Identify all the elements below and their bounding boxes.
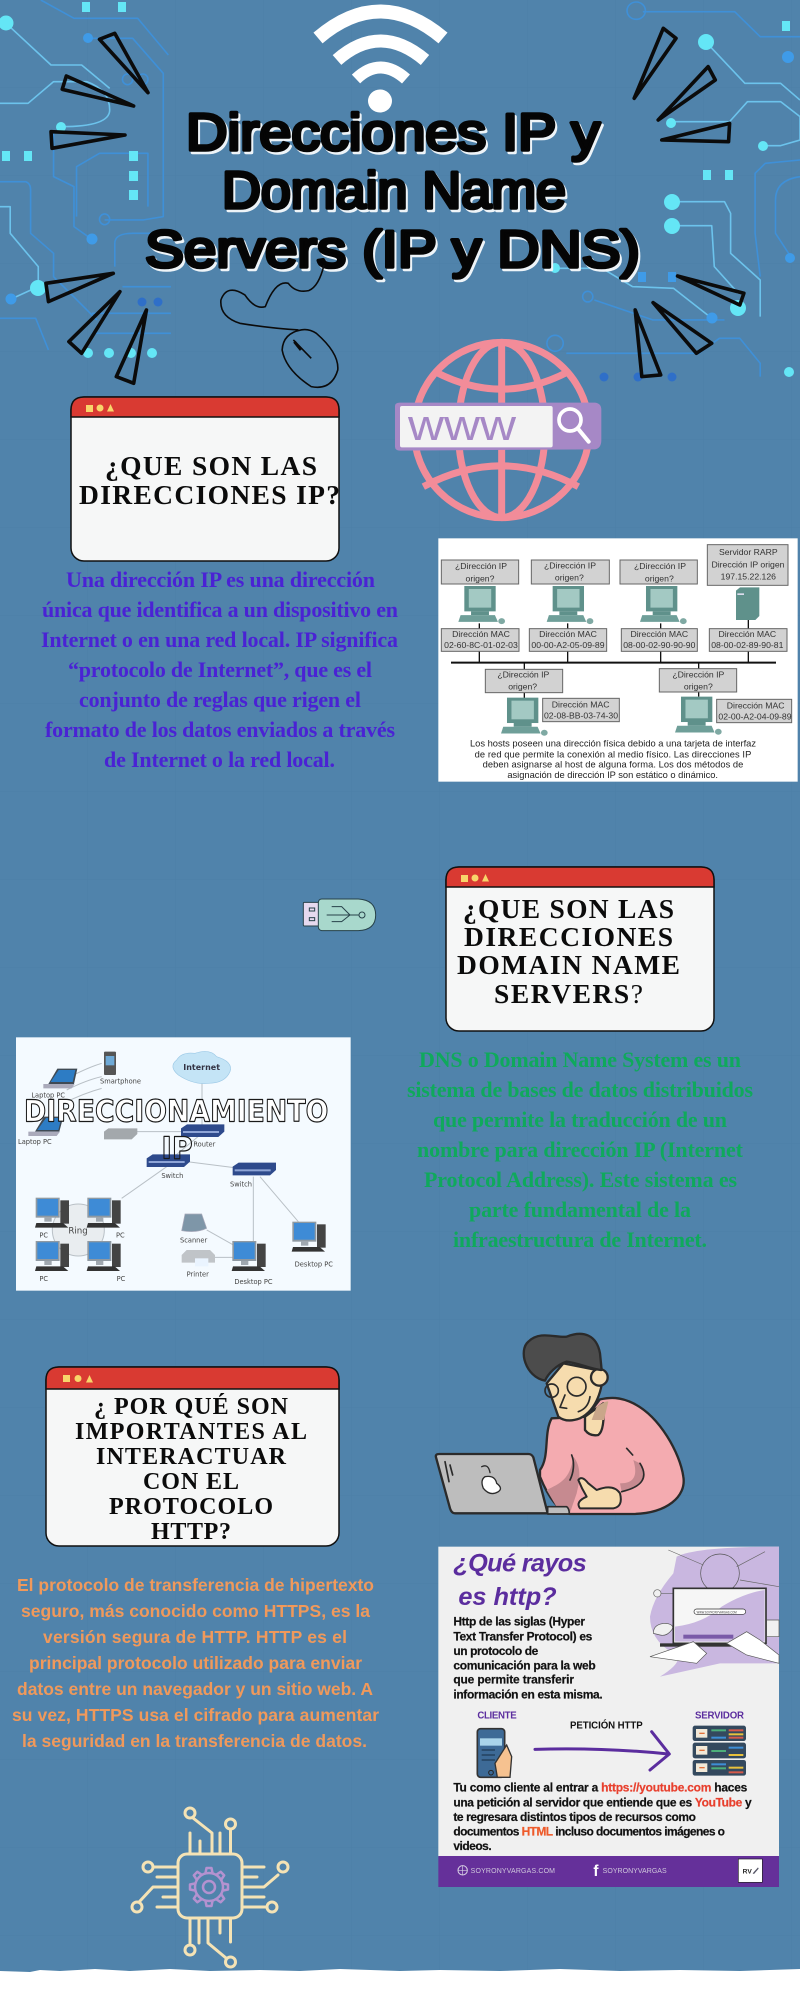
image: diagrama de red MAC e IP: Dirección MAC [452,629,510,639]
icon: server [736,587,759,620]
heading: que son las direcciones ip [79,450,340,510]
heading: domain name servers: ¿QUE SON LAS [463,893,674,924]
image: diagrama de red MAC e IP: origen? [555,573,584,583]
heading: domain name servers: DIRECCIONES [464,921,673,952]
text block: definicion DNS: que permite la traducción de un [433,1107,727,1132]
image: que rayos es http: una petición al servidor que entiende que es YouTube y [453,1795,752,1809]
image: que rayos es http: Http de las siglas (Hyper [453,1615,585,1629]
image: que rayos es http [438,1547,779,1887]
image: direccionamiento IP: Printer [187,1271,209,1279]
image: que rayos es http: videos. [453,1839,492,1853]
image: direccionamiento IP: PC [116,1232,125,1240]
text block: definicion DNS: Protocol Address). Este sistema es [424,1167,737,1192]
icon: server racks [693,1726,746,1776]
title: Direcciones IP y [186,104,600,162]
internet cloud [173,1051,231,1084]
heading: por que son importantes: ¿ POR QUÉ SON [94,1394,289,1420]
icon: usb drive [303,899,376,931]
image: diagrama de red MAC e IP: 08-00-02-89-90-81 [711,640,784,650]
image: que rayos es http: PETICIÓN HTTP [570,1720,643,1732]
image: direccionamiento IP: PC [39,1275,48,1283]
heading: por que son importantes: IMPORTANTES AL [75,1419,307,1445]
title: Direcciones IP y [188,106,602,164]
heading: domain name servers: SERVERS? [494,978,643,1009]
image: diagrama de red MAC e IP: ¿Dirección IP [634,561,686,571]
heading: por que son importantes: HTTP? [151,1519,231,1545]
image: diagrama de red MAC e IP: Dirección MAC [630,629,688,639]
image: direccionamiento IP: PC [39,1232,48,1240]
text block: definicion IP: única que identifica a un dispositivo en [42,597,398,622]
image: direccionamiento IP: Laptop PC [18,1138,52,1146]
heading: por que son importantes: INTERACTUAR [96,1444,287,1470]
text block: definicion DNS [407,1047,753,1252]
icon: microchip with gear [132,1808,288,1967]
image: diagrama de red MAC e IP: Dirección MAC [727,701,785,711]
text block: protocolo HTTPS: seguro, más conocido como HTTPS, es la [21,1601,370,1621]
title: Servers (IP y DNS) [145,221,640,279]
heading: que son las direcciones ip: ¿QUE SON LAS [105,450,317,481]
heading: por que son importantes [75,1394,307,1545]
image: diagrama de red MAC e IP: Los hosts poseen una dirección física debido a una tarjeta de interfaz [470,739,756,749]
image: diagrama de red MAC e IP: de red que permite la conexión al medio físico. Las direcciones IP [475,749,751,759]
image: diagrama de red MAC e IP: origen? [645,573,674,583]
text block: definicion IP: “protocolo de Internet”, que es el [68,657,372,682]
footer band: f [593,1863,599,1880]
text block: protocolo HTTPS: datos entre un navegador y un sitio web. A [17,1679,373,1699]
text block: definicion IP: de Internet o la red local. [104,747,335,772]
image: que rayos es http: es http? [458,1583,557,1611]
heading: domain name servers [457,893,680,1009]
www text: www [407,402,517,450]
devices [28,1052,326,1271]
image: que rayos es http: Text Transfer Protocol) es [453,1629,593,1643]
image: que rayos es http: SERVIDOR [695,1711,744,1722]
heading: domain name servers: DOMAIN NAME [457,949,680,980]
illustration: person with laptop [436,1334,684,1514]
image: que rayos es http: un protocolo de [453,1644,539,1658]
title [145,104,642,282]
image: direccionamiento IP: PC [117,1275,126,1283]
illustration: laptop and globe [650,1547,779,1677]
text block: definicion DNS: DNS o Domain Name System es un [419,1047,741,1072]
image: diagrama de red MAC e IP: Dirección MAC [552,699,610,709]
heading: que son las direcciones ip: DIRECCIONES IP? [79,479,340,510]
text block: protocolo HTTPS: la seguridad en la transferencia de datos. [22,1731,367,1751]
icon: wifi [318,12,443,112]
image: que rayos es http: comunicación para la web [453,1659,596,1673]
footer band: RV [743,1868,752,1875]
image: diagrama de red MAC e IP: Dirección MAC [539,629,597,639]
circuit board decoration [0,0,800,382]
icon: computer mouse [221,265,338,387]
footer band: SOYRONYVARGAS.COM [471,1868,555,1875]
footer band [438,1856,779,1887]
panel: que son las direcciones IP [71,397,340,561]
image: diagrama de red MAC e IP: 197.15.22.126 [721,571,776,581]
panel: que son las direcciones domain name servers [446,867,714,1031]
heading: direccionamiento IP: DIRECCIONAMIENTO [24,1095,328,1130]
text block: definicion IP: Una dirección IP es una dirección [66,567,375,592]
image: diagrama de red MAC e IP: 00-00-A2-05-09-89 [531,640,605,650]
panel: por que son importantes [46,1367,339,1546]
image: direccionamiento IP: Switch [161,1172,183,1180]
image: que rayos es http: te regresara distintos tipos de recursos como [453,1810,696,1824]
image: direccionamiento IP: Smartphone [100,1077,141,1085]
image: direccionamiento IP [16,1037,351,1291]
title: Domain Name [224,164,568,222]
heading: direccionamiento IP [24,1095,328,1167]
image: diagrama de red MAC e IP: 02-08-BB-03-74-30 [544,710,618,720]
image: que rayos es http: Tu como cliente al entrar a https://youtube.com haces [453,1781,748,1795]
icon: www globe with search bar [395,342,601,518]
image: que rayos es http: que permite transferir [453,1673,574,1687]
image: diagrama de red MAC e IP: ¿Dirección IP [672,669,725,679]
image: direccionamiento IP: Desktop PC [295,1261,333,1269]
image: direccionamiento IP: Switch [230,1181,252,1189]
gear [190,1868,228,1906]
image: direccionamiento IP: Laptop PC [31,1091,65,1099]
image: diagrama de red MAC e IP: origen? [466,573,495,583]
footer band: SOYRONYVARGAS [603,1868,667,1875]
image: diagrama de red MAC e IP: ¿Dirección IP [544,560,596,570]
black spikes around title [46,28,744,383]
image: direccionamiento IP: Desktop PC [234,1278,273,1286]
image: direccionamiento IP: Scanner [180,1237,207,1245]
image: diagrama de red MAC e IP: Servidor RARP [719,547,778,557]
image: diagrama de red MAC e IP: Dirección MAC [718,629,776,639]
text block: definicion IP: conjunto de reglas que rigen el [79,687,361,712]
illustration: laptop and globe: WWW.SOYRONYVARGAS.COM [697,1610,737,1614]
text block: definicion DNS: nombre para dirección IP (Internet [417,1137,744,1162]
heading: por que son importantes: CON EL [143,1469,239,1495]
torn white paper edge [0,1969,800,2000]
heading: por que son importantes: PROTOCOLO [109,1494,273,1520]
image: diagrama de red MAC e IP: ¿Dirección IP [497,669,550,679]
image: diagrama de red MAC e IP: Dirección IP origen [712,559,785,569]
image: diagrama de red MAC e IP: deben asignarse al host de alguna forma. Los dos métodos de [483,760,743,770]
text block: definicion IP [41,567,398,772]
image: diagrama de red MAC e IP: origen? [684,681,713,691]
image: diagrama de red MAC e IP: ¿Dirección IP [455,561,507,571]
title: Servers (IP y DNS) [147,224,642,282]
text block: protocolo HTTPS [12,1575,379,1751]
image: diagrama de red MAC e IP [438,538,798,782]
title: Domain Name [222,162,566,220]
image: diagrama de red MAC e IP: asignación de dirección IP son estático o dinámico. [507,770,718,780]
text block: protocolo HTTPS: El protocolo de transferencia de hipertexto [17,1575,374,1595]
text block: protocolo HTTPS: su vez, HTTPS usa el cifrado para aumentar [12,1705,379,1725]
internet cloud: Internet [183,1063,220,1072]
text block: protocolo HTTPS: versión segura de HTTP. HTTP es el [43,1627,347,1647]
text block: definicion DNS: infraestructura de Internet. [453,1227,707,1252]
text block: definicion IP: formato de los datos enviados a través [45,717,395,742]
heading: direccionamiento IP: IP [161,1132,193,1167]
image: diagrama de red MAC e IP: 02-60-8C-01-02-03 [444,640,518,650]
image: diagrama de red MAC e IP: 02-00-A2-04-09-89 [718,711,792,721]
text block: definicion DNS: parte fundamental de la [469,1197,691,1222]
image: direccionamiento IP: Router [193,1141,216,1149]
image: direccionamiento IP: Ring [68,1226,88,1236]
image: que rayos es http: CLIENTE [477,1711,517,1722]
image: que rayos es http: información en esta misma. [453,1687,603,1701]
icon: phone [477,1729,512,1777]
image: que rayos es http: ¿Qué rayos [453,1550,587,1578]
image: diagrama de red MAC e IP: 08-00-02-90-90-90 [623,640,696,650]
image: diagrama de red MAC e IP: origen? [508,681,537,691]
image: que rayos es http: documentos HTML incluso documentos imágenes o [453,1825,725,1839]
text block: definicion DNS: sistema de bases de datos distribuidos [407,1077,753,1102]
text block: protocolo HTTPS: principal protocolo utilizado para enviar [29,1653,362,1673]
text block: definicion IP: Internet o en una red local. IP significa [41,627,398,652]
arrow: peticion http [535,1732,669,1770]
